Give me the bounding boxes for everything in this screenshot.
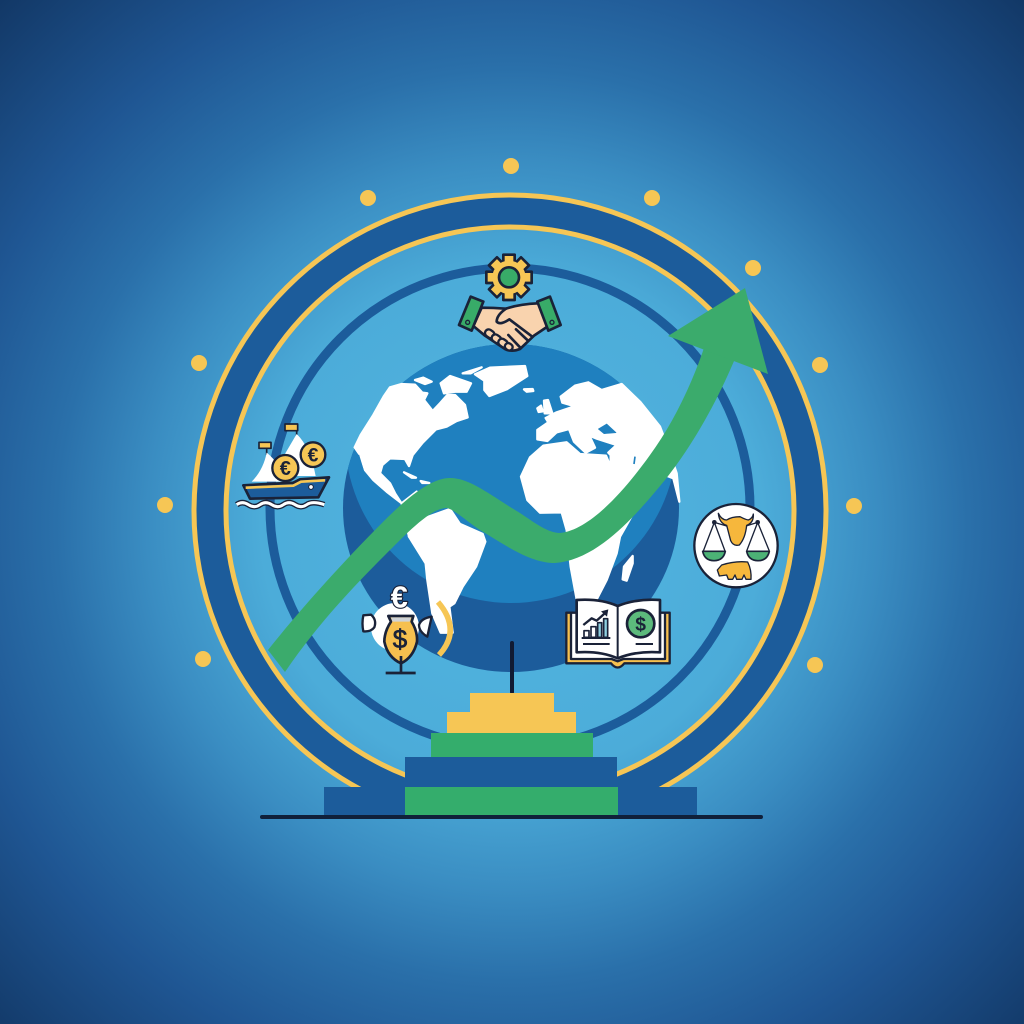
gold arc <box>438 602 450 655</box>
icon: ship with euro coins: € <box>308 446 319 467</box>
green tier <box>431 733 593 757</box>
urn stand <box>386 656 416 673</box>
balance arms <box>703 522 769 551</box>
globe <box>343 344 680 672</box>
euro coins <box>272 442 325 481</box>
icon: open book with chart <box>566 600 670 667</box>
chart <box>583 612 607 625</box>
hull <box>243 477 329 499</box>
icon: open book with chart: $ <box>635 615 646 636</box>
gear <box>486 255 532 300</box>
concentric rings <box>194 195 826 827</box>
white patch behind urn <box>371 603 419 651</box>
green pans <box>703 551 725 561</box>
urn handles <box>362 615 375 631</box>
euro symbol: € <box>391 580 408 614</box>
icon: gear and handshake <box>459 255 561 352</box>
continents <box>355 366 679 633</box>
bull <box>718 513 753 545</box>
icon: ship with euro coins <box>237 424 329 507</box>
icon: money urn: $ <box>393 624 408 654</box>
green growth arrow <box>268 288 768 672</box>
decorative gold dots <box>157 158 862 673</box>
waves <box>237 503 324 507</box>
icon: scales with bull and bear <box>694 504 778 587</box>
bear <box>717 562 751 579</box>
stem <box>510 641 514 694</box>
dollar coin <box>627 610 654 637</box>
urn body <box>384 616 417 663</box>
sails and flags <box>259 424 298 455</box>
podium base <box>260 641 763 819</box>
handshake hands <box>473 303 548 351</box>
cuffs <box>459 297 561 331</box>
icon: money urn <box>362 580 432 673</box>
gold tiers <box>470 693 554 713</box>
blue tiers <box>405 757 617 788</box>
ground line <box>260 815 763 819</box>
icon: ship with euro coins: € <box>280 458 291 480</box>
green base block <box>405 787 618 816</box>
